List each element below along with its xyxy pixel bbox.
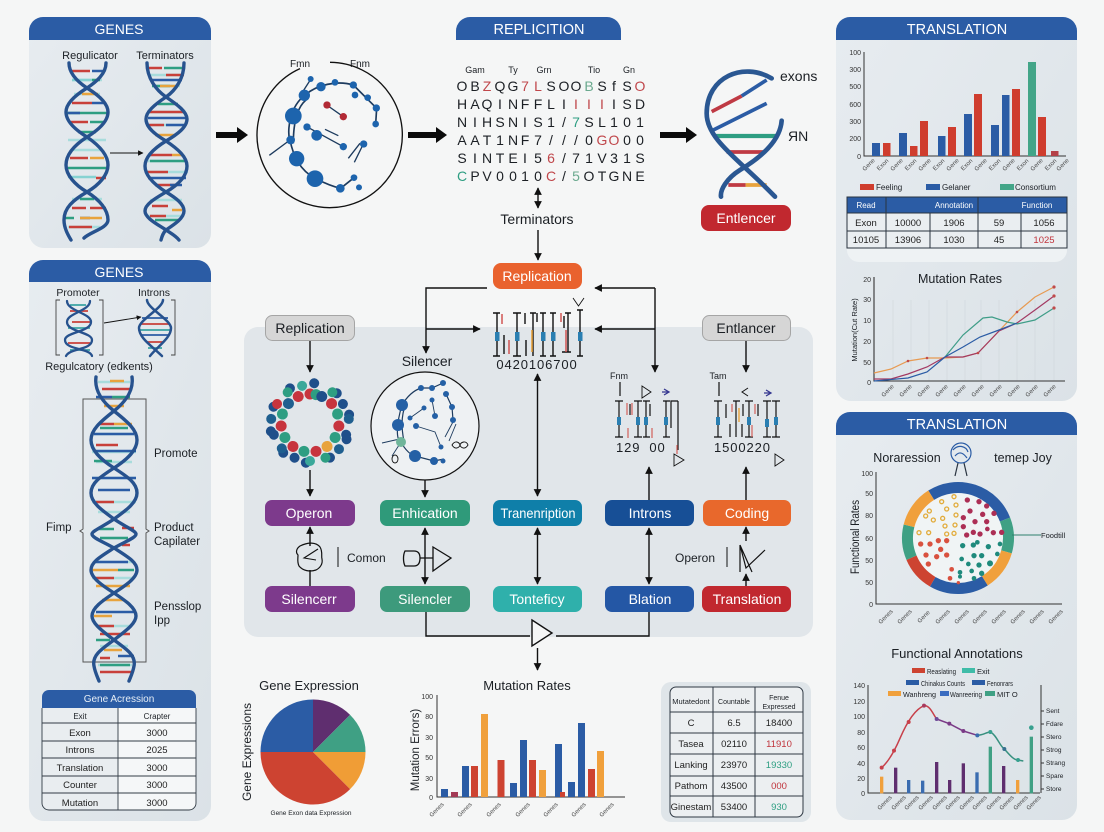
legend: functional annotations: Wanreering [950, 690, 982, 699]
arrow: circle to replication [408, 127, 447, 143]
line chart: mutation rates: 10 [863, 318, 871, 325]
header: translation lower [836, 412, 1077, 435]
pill: enhancer [701, 205, 791, 231]
bar chart: mutation rates: 0 [429, 795, 433, 802]
arrow: promoter to introns [104, 317, 141, 323]
bar chart: mutation rates: Genes [457, 802, 474, 819]
card: mutation table: 53400 [721, 802, 747, 813]
label: terminators center: Terminators [500, 211, 574, 227]
dna helix right [145, 63, 188, 240]
pie axis label: Gene Expressions [240, 703, 254, 801]
card: mutation table: 19330 [766, 760, 792, 771]
axis title: Functional Rates [850, 500, 862, 574]
small helix: introns [139, 300, 175, 356]
arrow: grid to dna [660, 127, 697, 143]
pill: silencler [380, 586, 470, 612]
pill: enhication [380, 500, 470, 526]
table: gene expression: Gene Acression [84, 694, 154, 705]
icon: protein ring [265, 378, 355, 468]
bar chart: top: 300 [849, 67, 861, 74]
pill: enhancer grey [702, 316, 790, 340]
combo chart: functional annotations: Genes [972, 795, 989, 812]
label: rn: ЯN [788, 128, 808, 144]
bar chart: top: Exon [1016, 158, 1030, 172]
chart: donut cluster: Genes [935, 609, 952, 626]
panel: genes top [29, 17, 211, 248]
combo chart: functional annotations: 100 [853, 714, 865, 721]
combo chart: functional annotations: Stero [1046, 734, 1062, 741]
bar chart: mutation rates: 50 [425, 755, 433, 762]
icon: gate triangle [404, 547, 451, 571]
icon: head [951, 443, 971, 476]
pill: operon: Operon [286, 505, 332, 521]
label: operon: Operon [675, 551, 715, 565]
bar chart: mutation rates: Genes [543, 802, 560, 819]
label: product capilater: Capilater [154, 536, 200, 548]
chart: donut cluster: 50 [865, 491, 873, 498]
arrow: genes to circle [216, 127, 248, 143]
header: translation: TRANSLATION [907, 22, 1007, 38]
bar chart: top: Gene [1002, 158, 1017, 173]
grid row 6: CPV0010 C / 5 OTGNE [457, 168, 645, 184]
bar chart: mutation rates: Genes [429, 802, 446, 819]
combo chart: functional annotations: 60 [857, 745, 865, 752]
bar chart: top: Exon [988, 158, 1002, 172]
panel: translation top [836, 17, 1077, 401]
chart: donut cluster: Genes [972, 609, 989, 626]
digits introns: 129 00 [616, 440, 666, 455]
data table: top: Exon [855, 218, 877, 229]
bar chart: top: Exon [904, 158, 918, 172]
pill: tonteficy [493, 586, 582, 612]
card: mutation table: Ginestam [671, 802, 711, 813]
pill: transcription [493, 500, 582, 526]
chart: donut cluster: Genes [1048, 609, 1065, 626]
chart: donut cluster: Genes [878, 609, 895, 626]
bar chart: mutation rates: 100 [421, 694, 433, 701]
card: mutation table: 43500 [721, 781, 747, 792]
bar chart: top: Exon [1044, 158, 1058, 172]
title: mutation rates line chart: Mutation Rates [918, 272, 1002, 286]
line chart: mutation rates: 20 [863, 277, 871, 284]
label: comon: Comon [347, 551, 386, 565]
label: fnm: Fnm [350, 59, 370, 70]
chart: donut cluster: 80 [865, 513, 873, 520]
combo chart: functional annotations: Strang [1046, 760, 1066, 767]
card: mutation table: C [688, 718, 695, 729]
combo chart: functional annotations: Genes [932, 795, 949, 812]
chart: donut cluster: 100 [861, 471, 873, 478]
legend: functional annotations: Reaslating [927, 667, 956, 676]
title: gene expression: Gene Expression [259, 678, 359, 693]
legend: functional annotations: MIT O [997, 690, 1018, 699]
header: genes lower: GENES [94, 264, 144, 280]
table: gene expression: 3000 [146, 780, 168, 791]
card: mutation table: 18400 [766, 718, 792, 729]
pill: enhancer grey: Entlancer [716, 320, 776, 336]
combo chart: functional annotations: 20 [857, 776, 865, 783]
grid column labels: Ty [508, 65, 518, 75]
combo chart: functional annotations: Strog [1046, 747, 1062, 754]
chart: donut cluster: 60 [865, 536, 873, 543]
label: promote: Promote [154, 448, 197, 460]
sequence letter grid [457, 65, 646, 184]
lighter band [847, 248, 1067, 262]
connector lines top [426, 288, 655, 372]
bar chart: top: Exon [876, 158, 890, 172]
legend: functional annotations: Exit [977, 667, 990, 676]
header: translation lower: TRANSLATION [907, 417, 1007, 433]
combo chart: functional annotations: 40 [857, 761, 865, 768]
small helix: promoter [56, 300, 103, 356]
table: gene expression [42, 690, 196, 810]
line chart: mutation rates: Gene [917, 384, 932, 399]
bar chart: top: 200 [849, 136, 861, 143]
table: gene expression: 2025 [146, 745, 168, 756]
card: mutation table: Expressed [762, 704, 796, 711]
arrow: entlancer down [745, 341, 747, 372]
arrow: barcode to transcription [536, 374, 538, 496]
arrow: translation short [745, 574, 747, 586]
arrow: terminators to replication [537, 230, 539, 260]
grid row 2: HAQINFFLI III ISD [457, 96, 645, 112]
pill: blation: Blation [629, 591, 671, 607]
chart: donut cluster: 50 [865, 580, 873, 587]
bar chart: mutation rates: 80 [425, 714, 433, 721]
combo chart: functional annotations: Genes [959, 795, 976, 812]
title: mutation rates: Mutation Rates [483, 678, 571, 693]
chart: donut cluster: Genes [1029, 609, 1046, 626]
pill: transcription: Tranenription [500, 505, 576, 521]
connector bottom with triangle [426, 612, 649, 670]
icon: clock and arrow between operon and silencerr [297, 527, 322, 586]
legend: top chart: Consortium [1015, 183, 1056, 192]
pill: enhancer: Entlencer [716, 210, 776, 226]
bar chart: top: Exon [960, 158, 974, 172]
legend: top chart: Feeling [876, 183, 902, 192]
bar chart: mutation rates: Genes [515, 802, 532, 819]
bar chart: mutation rates: Genes [571, 802, 588, 819]
label: fimp: Fimp [46, 522, 72, 534]
label: fmn: Fmn [290, 59, 310, 70]
icon: zigzag [740, 545, 765, 572]
pill: coding [703, 500, 791, 526]
combo chart: functional annotations: Genes [1013, 795, 1030, 812]
combo chart: functional annotations [853, 683, 1066, 812]
arrow: introns up [648, 467, 650, 500]
table: gene expression: Translation [57, 763, 103, 774]
header: replication: REPLICITION [493, 22, 585, 38]
combo chart: functional annotations: Genes [999, 795, 1016, 812]
combo chart: functional annotations: Genes [877, 795, 894, 812]
label: introns: Introns [138, 287, 170, 299]
card: mutation table: 930 [771, 802, 787, 813]
dna arc icon [707, 72, 782, 197]
data table: top: 13906 [895, 235, 921, 246]
bar chart: top: Exon [932, 158, 946, 172]
combo chart: functional annotations: Sent [1046, 708, 1060, 715]
barcode coding [709, 371, 784, 466]
bar chart: top: Gene [1056, 158, 1071, 173]
line chart: mutation rates: 30 [863, 297, 871, 304]
combo chart: functional annotations: Genes [986, 795, 1003, 812]
card: mutation table: Pathom [675, 781, 707, 792]
combo chart: functional annotations: Genes [904, 795, 921, 812]
line chart: mutation rates: 20 [863, 339, 871, 346]
chart: donut cluster: Genes [991, 609, 1008, 626]
line chart: mutation rates: Gene [971, 384, 986, 399]
data table: top: 59 [994, 218, 1004, 229]
header: genes: GENES [94, 21, 144, 37]
combo chart: functional annotations: 0 [861, 791, 865, 798]
arrow: circle to enhication [424, 480, 426, 497]
label: noraression: Noraression [873, 451, 941, 465]
arrow: introns blation [648, 528, 650, 584]
header: replication [456, 17, 621, 40]
table: gene expression: Introns [65, 745, 95, 756]
card: mutation table: Fenue [769, 695, 789, 702]
combo chart: functional annotations: 80 [857, 730, 865, 737]
pie caption: Gene Exon data Expression [271, 810, 352, 817]
combo chart: functional annotations: Spare [1046, 773, 1064, 780]
arrow: double below grid [537, 188, 539, 208]
label: tam: Tam [709, 371, 727, 381]
barcode center [493, 298, 584, 372]
pill: enhication: Enhication [392, 505, 458, 521]
pill: translation: Translation [713, 591, 781, 607]
grid row 5: SINTEI5 6 /71V31S [457, 150, 645, 166]
chart: donut cluster: Gene [917, 610, 932, 625]
table: gene expression: Counter [63, 780, 97, 791]
bar chart: mutation rates [410, 694, 625, 819]
label: product capilater: Product [154, 522, 194, 534]
line chart: mutation rates: Gene [1025, 384, 1040, 399]
pill: introns [605, 500, 694, 526]
combo chart: functional annotations: 120 [853, 699, 865, 706]
line chart: mutation rates: Gene [1007, 384, 1022, 399]
arrow: replication to ring [309, 341, 311, 372]
big dna helix [91, 377, 137, 681]
bar chart: top: Gene [1030, 158, 1045, 173]
data table: top: 1056 [1033, 218, 1055, 229]
pill: tonteficy: Tonteficy [509, 591, 565, 607]
label: regulicator: Regulicator [62, 50, 118, 62]
bar chart: top: Gene [862, 158, 877, 173]
data table: top: 45 [994, 235, 1004, 246]
network circle diagram [257, 59, 402, 208]
pill: replication grey [266, 316, 354, 340]
chart: donut cluster: 50 [865, 558, 873, 565]
data table: top: Annotation [935, 201, 973, 210]
card: mutation table: 11910 [766, 739, 792, 750]
bar chart: top [849, 50, 1071, 173]
pie chart: gene expression [240, 700, 366, 817]
pill: blation [605, 586, 694, 612]
grid row 4: AAT1NF7///0 GO 00 [457, 132, 644, 148]
bar chart: top: Gene [974, 158, 989, 173]
label: silencer: Silencer [402, 353, 453, 369]
combo chart: functional annotations: Genes [891, 795, 908, 812]
pill: replication orange [493, 263, 582, 289]
header: genes lower [29, 260, 211, 282]
card: mutation table: 02110 [721, 739, 747, 750]
grid row 3: NIHSNIS1/ 7 SL101 [457, 114, 644, 130]
combo chart: functional annotations: Fdare [1046, 721, 1063, 728]
grid row 1: OBZQG7L SOOB SfSO [457, 78, 646, 94]
legend: functional annotations: Chinakus Counts [921, 679, 965, 688]
arrow: between helices [110, 152, 143, 154]
line chart: mutation rates: Gene [881, 384, 896, 399]
digits coding: 1500220 [714, 440, 771, 455]
line chart: mutation rates: 0 [867, 380, 871, 387]
arrow: ring to operon [309, 470, 311, 496]
card: mutation table: Mutatedont [672, 697, 711, 706]
combo chart: functional annotations: Genes [945, 795, 962, 812]
pill: replication orange: Replication [502, 268, 572, 284]
label: fnm small: Fnm [610, 371, 628, 381]
header: translation [836, 17, 1077, 40]
arrow: up to coding [745, 527, 747, 541]
data table: top: 1906 [943, 218, 965, 229]
card: mutation table: 23970 [721, 760, 747, 771]
card: mutation table: 000 [771, 781, 787, 792]
table: gene expression: Exon [69, 728, 91, 739]
barcode introns [610, 371, 684, 466]
line chart: mutation rates [850, 277, 1065, 399]
line chart: mutation rates: 50 [863, 360, 871, 367]
label: comon [338, 547, 386, 567]
chart: donut cluster: Genes [1010, 609, 1027, 626]
legend: top chart: Gelaner [942, 183, 971, 192]
table: gene expression: 3000 [146, 728, 168, 739]
bar chart: mutation rates: Genes [486, 802, 503, 819]
data table: top [847, 197, 1067, 248]
chart: donut cluster: 0 [869, 602, 873, 609]
bar chart: top: Gene [946, 158, 961, 173]
bar chart: mutation rates: Mutation Errors) [410, 709, 422, 791]
line chart: mutation rates: Gene [935, 384, 950, 399]
bracket around big helix [80, 399, 149, 662]
combo chart: functional annotations: Store [1046, 786, 1062, 793]
data table: top: Read [856, 201, 876, 210]
bar chart: top: 0 [857, 154, 861, 161]
pill: replication grey: Replication [275, 320, 345, 336]
label: temep joy: temep Joy [994, 451, 1053, 465]
pill: introns: Introns [629, 505, 671, 521]
card: mutation table: Countable [718, 699, 750, 706]
data table: top: 1030 [943, 235, 965, 246]
chart: donut cluster: Genes [954, 609, 971, 626]
label: terminators: Terminators [136, 50, 194, 62]
data table: top: Function [1022, 201, 1052, 210]
legend: top chart [860, 183, 1056, 192]
grid column labels [465, 65, 635, 75]
line chart: mutation rates: Mutation(Cut Rate) [850, 298, 859, 362]
card: mutation table: 6.5 [727, 718, 741, 729]
table: gene expression: 3000 [146, 763, 168, 774]
digits center: 0420106700 [496, 357, 578, 372]
line chart: mutation rates: Gene [1043, 384, 1058, 399]
dna helix left [64, 63, 108, 240]
pill: operon [265, 500, 355, 526]
chart: donut cluster [850, 471, 1066, 626]
title: functional annotations: Functional Annotations [891, 646, 1023, 661]
grid column labels: Gam [465, 65, 485, 75]
table: gene expression: 3000 [146, 798, 168, 809]
panel: center workflow [244, 327, 813, 637]
card: mutation table: Tasea [678, 739, 704, 750]
bar chart: top: Gene [918, 158, 933, 173]
network circle center [371, 372, 479, 480]
combo chart: functional annotations: Genes [1026, 795, 1043, 812]
header: genes [29, 17, 211, 40]
bar chart: top: Gene [890, 158, 905, 173]
circle outline and nodes [257, 62, 402, 208]
arrow: transcription tonteficy [536, 528, 538, 584]
arrow: enhication silencler [424, 528, 426, 584]
pill: translation [702, 586, 791, 612]
chart: donut cluster: Genes [897, 609, 914, 626]
callout label: Foodtill [1041, 531, 1066, 540]
label: pensslop ipp: Pensslop [154, 601, 201, 613]
grid column labels: Tio [588, 65, 600, 75]
pill: silencler: Silencler [398, 591, 452, 607]
label: pensslop ipp: Ipp [154, 615, 170, 627]
label: exons: exons [780, 68, 817, 84]
table: gene expression: Exit [73, 712, 87, 721]
legend: functional annotations [888, 667, 1018, 699]
bar chart: mutation rates: 30 [425, 735, 433, 742]
panel: translation bottom [836, 412, 1077, 820]
data table: top: 10105 [853, 235, 879, 246]
data table: top: 10000 [895, 218, 921, 229]
arrow: coding up [745, 467, 747, 500]
label: regulcatory elements: Regulcatory (edkents) [45, 361, 153, 373]
pill: silencerr [265, 586, 355, 612]
line chart: mutation rates: Gene [899, 384, 914, 399]
combo chart: functional annotations: Genes [918, 795, 935, 812]
label: promoter: Promoter [56, 287, 100, 299]
legend: functional annotations: Fenonrars [987, 679, 1013, 688]
card: mutation table: Lanking [674, 760, 708, 771]
line chart: mutation rates: Gene [953, 384, 968, 399]
bar chart: mutation rates: 30 [425, 776, 433, 783]
combo chart: functional annotations: 140 [853, 683, 865, 690]
grid column labels: Gn [623, 65, 635, 75]
bar chart: top: 300 [849, 119, 861, 126]
bar chart: top: 600 [849, 102, 861, 109]
pill: silencerr: Silencerr [281, 591, 337, 607]
bar chart: top: 100 [849, 50, 861, 57]
table: gene expression: Mutation [62, 798, 98, 809]
pill: coding: Coding [725, 505, 769, 521]
card: mutation table [661, 682, 811, 822]
bar chart: top: 500 [849, 84, 861, 91]
table: gene expression: Crapter [144, 712, 171, 721]
line chart: mutation rates: Gene [989, 384, 1004, 399]
data table: top: 1025 [1033, 235, 1055, 246]
legend: functional annotations: Wanhreng [903, 690, 936, 699]
bar chart: mutation rates: Genes [599, 802, 616, 819]
label: operon [675, 547, 727, 567]
grid column labels: Grn [536, 65, 552, 75]
panel: genes bottom [29, 260, 211, 821]
